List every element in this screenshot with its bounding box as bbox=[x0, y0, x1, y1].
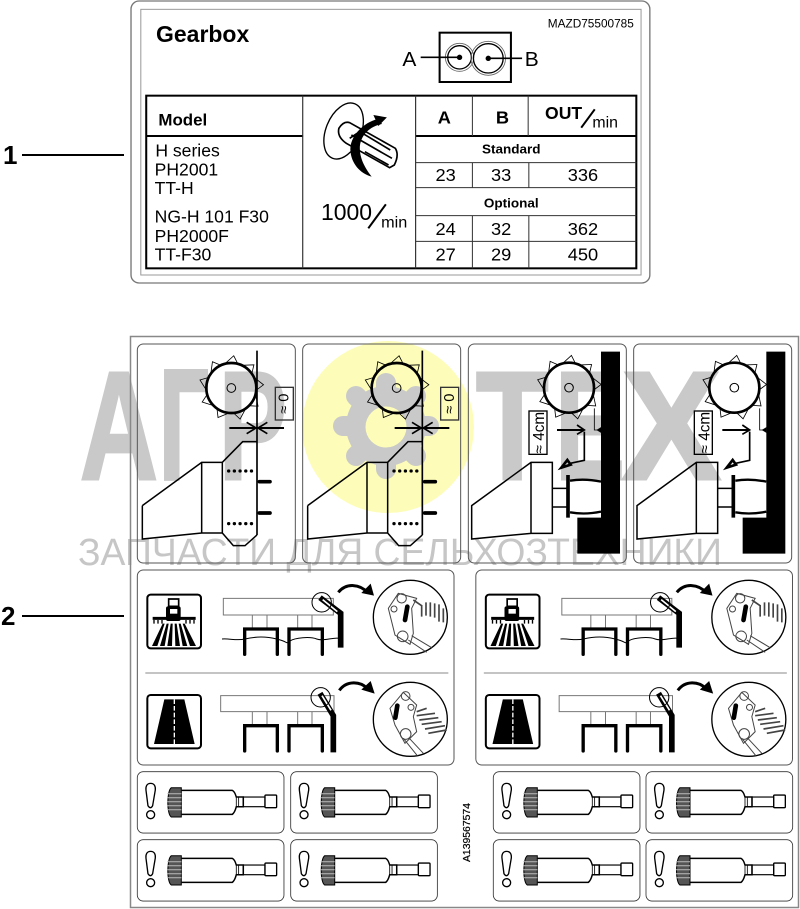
table: model column: TT-H bbox=[155, 178, 194, 198]
decal: bolt row right 2 bbox=[646, 772, 793, 833]
watermark letter T: Т bbox=[476, 341, 548, 513]
table rows: 27 bbox=[436, 245, 456, 265]
callout 1 bbox=[3, 140, 124, 170]
decal: 4 cm clearance B: ≈ 4cm bbox=[696, 412, 713, 453]
table: model column: PH2000F bbox=[155, 226, 229, 246]
decal: 4 cm clearance B bbox=[634, 344, 792, 563]
table header: OUT bbox=[545, 103, 582, 123]
decal: field and road positions, left bbox=[137, 570, 454, 765]
gearbox shaft diagram bbox=[402, 33, 539, 82]
table rows: 450 bbox=[568, 245, 598, 265]
table rows: 29 bbox=[491, 245, 511, 265]
icon: rotating pto shaft bbox=[316, 97, 397, 177]
label border bbox=[131, 1, 650, 283]
callout 1: 1 bbox=[3, 140, 17, 170]
table frame bbox=[146, 96, 636, 268]
callout 2 bbox=[1, 601, 124, 631]
decal: 4 cm clearance A bbox=[468, 344, 626, 563]
sheet part number: A139567574 bbox=[462, 803, 473, 862]
decal: zero clearance A: ≈ 0 bbox=[277, 394, 293, 414]
decal: bolt row right 3 bbox=[493, 840, 640, 901]
heading: Gearbox bbox=[156, 21, 250, 47]
input speed bbox=[321, 199, 407, 232]
table rows: Optional bbox=[484, 195, 539, 210]
watermark caption: ЗАПЧАСТИ ДЛЯ СЕЛЬХОЗТЕХНИКИ bbox=[78, 532, 722, 574]
table rows: 24 bbox=[436, 219, 456, 239]
panel: gearbox label bbox=[131, 1, 650, 283]
watermark letter G: Г bbox=[160, 340, 208, 511]
callout 2: 2 bbox=[1, 601, 15, 631]
input speed: 1000 bbox=[321, 199, 372, 225]
watermark letter A: А bbox=[80, 341, 158, 513]
decal: field and road positions, right bbox=[476, 570, 792, 765]
decal: bolt row right 1 bbox=[493, 772, 640, 833]
table rows: 32 bbox=[491, 219, 511, 239]
table header: B bbox=[496, 107, 509, 127]
decal: 4 cm clearance A: ≈ 4cm bbox=[531, 412, 548, 453]
panel: decal sheet bbox=[130, 336, 798, 908]
table: model column: H series bbox=[155, 141, 220, 161]
table rows bbox=[436, 142, 598, 265]
table: model column bbox=[155, 111, 269, 265]
table header: A bbox=[438, 107, 451, 127]
watermark logo bbox=[80, 339, 721, 513]
decal: zero clearance A bbox=[137, 344, 295, 563]
table header bbox=[438, 103, 618, 131]
table rows: 33 bbox=[491, 165, 511, 185]
table: model column: PH2001 bbox=[155, 160, 218, 180]
table rows: 23 bbox=[436, 165, 456, 185]
table rows: Standard bbox=[482, 142, 541, 157]
decal: zero clearance B: ≈ 0 bbox=[442, 394, 458, 414]
table: model column: Model bbox=[158, 111, 207, 130]
watermark letter R: Р bbox=[219, 340, 287, 512]
decal: bolt row left 1 bbox=[137, 772, 284, 833]
table: model column: NG-H 101 F30 bbox=[155, 207, 269, 227]
decal: bolt row left 3 bbox=[137, 840, 284, 901]
input speed: min bbox=[381, 214, 407, 232]
table header: min bbox=[592, 114, 618, 131]
gearbox shaft diagram: A bbox=[402, 48, 417, 71]
watermark letter X: Х bbox=[622, 339, 721, 512]
decal: bolt row left 4 bbox=[291, 840, 437, 901]
watermark letter E: Е bbox=[555, 340, 625, 512]
table: model column: TT-F30 bbox=[155, 245, 212, 265]
watermark gear bbox=[302, 341, 474, 513]
decal: bolt row left 2 bbox=[291, 772, 437, 833]
part number: MAZD75500785 bbox=[548, 17, 634, 30]
table rows: 336 bbox=[568, 165, 598, 185]
decal: bolt row right 4 bbox=[646, 840, 793, 901]
decal: zero clearance B bbox=[303, 344, 461, 563]
table rows: 362 bbox=[568, 219, 598, 239]
gearbox shaft diagram: B bbox=[525, 48, 539, 71]
